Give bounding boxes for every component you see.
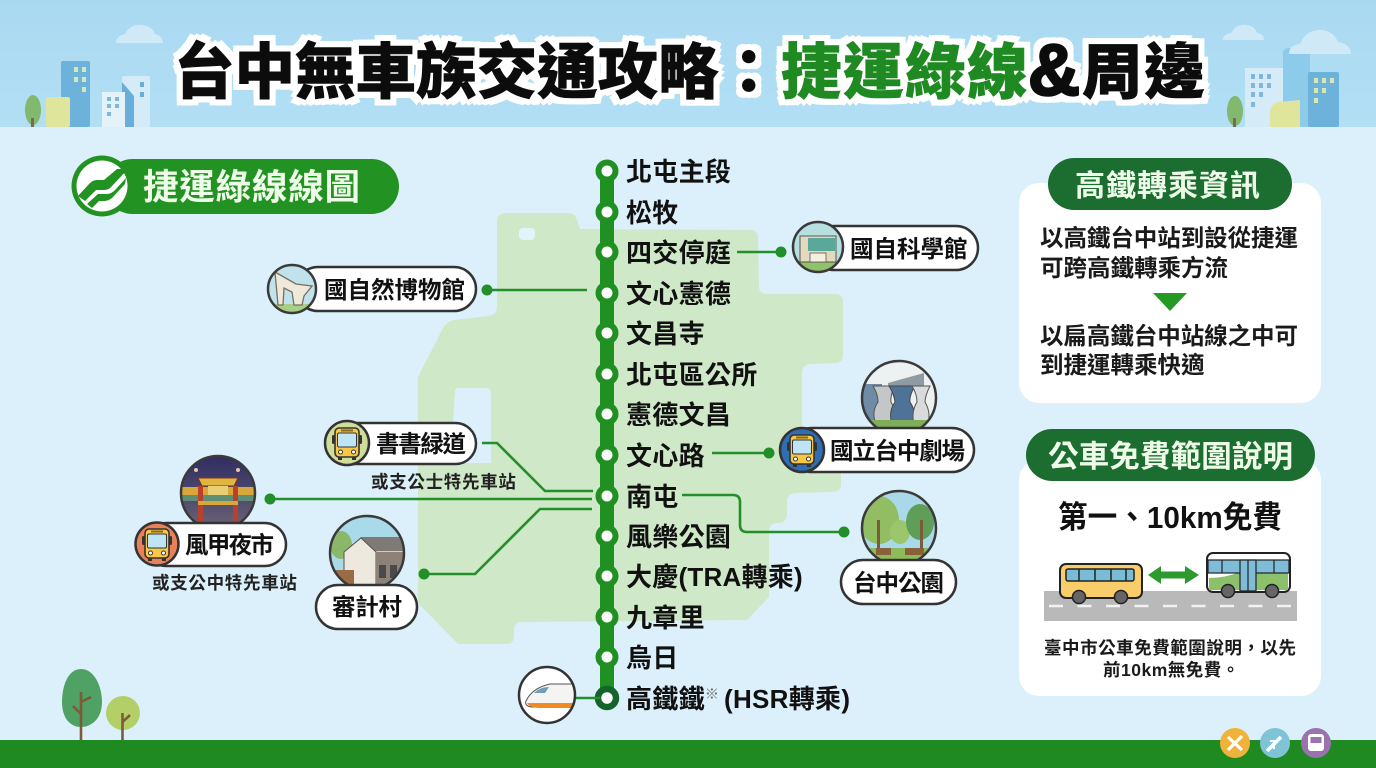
station names: (HSR轉乘) <box>724 684 850 714</box>
right city skyline <box>1223 25 1351 127</box>
trees <box>62 669 140 740</box>
road <box>1044 591 1297 621</box>
station markers <box>598 162 616 707</box>
text: transfer note: 到捷運轉乘快適 <box>1040 351 1205 378</box>
icon: bus stop <box>136 522 178 566</box>
title <box>174 31 1206 111</box>
ground strip <box>0 740 1376 768</box>
text: transfer route <box>1040 224 1298 281</box>
connector <box>482 284 587 296</box>
arrow: double headed <box>1148 566 1199 584</box>
panel: free bus range <box>1019 429 1321 696</box>
callout: Taichung park: 台中公園 <box>853 569 944 596</box>
callout: book green way: 或支公士特先車站 <box>371 472 517 492</box>
connector <box>264 494 592 504</box>
text: free range note: 前10km無免費。 <box>1103 660 1240 680</box>
station names: 憲德文昌 <box>626 400 731 430</box>
icon: science museum building <box>792 222 844 272</box>
green line route <box>598 157 850 714</box>
connector <box>712 448 774 458</box>
callout: book green way <box>325 421 593 492</box>
station names: 南屯 <box>626 482 679 512</box>
station names: 高鐵鐵 <box>626 684 705 714</box>
title: 台中無車族交通攻略： <box>174 38 779 106</box>
callout: Fengjia night market: 或支公中特先車站 <box>152 573 298 593</box>
callout: Taichung park <box>682 490 956 604</box>
icon: green bus <box>1207 553 1290 598</box>
icon: high speed rail train <box>519 667 600 723</box>
icon: bus stop <box>780 428 824 472</box>
station names: 北屯區公所 <box>626 360 758 390</box>
icon: village house <box>328 515 406 591</box>
station names: 大慶(TRA轉乘) <box>626 562 803 592</box>
station names: 四交停庭 <box>626 238 731 268</box>
station names: 北屯主段 <box>626 157 731 187</box>
text: first 10km free: 第一、10km免費 <box>1058 500 1282 535</box>
station names: 烏日 <box>626 643 679 673</box>
panel heading: 高鐵轉乘資訊 <box>1075 170 1260 203</box>
title: 捷運綠線 <box>781 38 1029 106</box>
left city skyline <box>25 25 163 127</box>
callout: natural science museum <box>268 265 587 313</box>
text: transfer route: 可跨高鐵轉乘方流 <box>1040 254 1228 281</box>
text: transfer note <box>1040 322 1298 378</box>
icon: theater building <box>860 360 938 427</box>
callout: book green way: 書書緑道 <box>376 431 466 457</box>
text: free range note <box>1044 638 1296 680</box>
connector <box>482 443 593 491</box>
panel: HSR transfer info <box>1019 158 1321 403</box>
station names: 文心憲德 <box>626 279 731 309</box>
section heading: green line map: 捷運綠線線圖 <box>143 167 360 207</box>
title: 周邊 <box>1082 38 1206 106</box>
station names <box>626 157 850 714</box>
connector <box>737 246 786 258</box>
station names: 文心路 <box>626 441 705 471</box>
callout: Fengjia night market: 風甲夜市 <box>185 532 274 558</box>
section heading: green line map <box>72 156 399 216</box>
footer badge icons <box>1220 728 1331 758</box>
header band <box>0 0 1376 127</box>
text: transfer note: 以扁高鐵台中站線之中可 <box>1040 322 1298 349</box>
icon: yellow bus <box>1060 564 1142 604</box>
callout: science museum: 國自科學館 <box>850 235 968 262</box>
station names: ※ <box>705 686 719 702</box>
icon: plane badge <box>1260 728 1290 758</box>
callout: science museum <box>737 222 978 272</box>
station names: 九章里 <box>626 603 705 633</box>
station names: 松牧 <box>626 198 679 228</box>
station names: 風樂公園 <box>626 522 731 552</box>
arrow: down triangle <box>1153 293 1187 311</box>
panel heading <box>1048 158 1292 210</box>
text: free range note: 臺中市公車免費範圍說明，以先 <box>1044 638 1296 658</box>
icon: route badge <box>1220 728 1250 758</box>
text: transfer route: 以高鐵台中站到設從捷運 <box>1040 224 1298 251</box>
map of Taichung <box>418 213 843 644</box>
callout: Shen Ji village: 審計村 <box>332 594 402 620</box>
connector <box>418 509 592 580</box>
icon: bus badge <box>1301 728 1331 758</box>
callout: Shen Ji village <box>316 509 592 629</box>
icon: bus stop <box>325 421 369 465</box>
station names: 文昌寺 <box>626 319 705 349</box>
callout: natural science museum: 國自然博物館 <box>324 276 465 303</box>
panel heading: 公車免費範圍說明 <box>1048 440 1293 474</box>
title: & <box>1028 31 1080 111</box>
callout: Fengjia night market <box>136 456 592 593</box>
connector <box>682 495 850 538</box>
icon: park <box>860 490 938 559</box>
panel heading <box>1026 429 1315 481</box>
icon: night market gate <box>180 454 256 522</box>
icon: museum <box>268 265 316 313</box>
callout: national theater: 國立台中劇場 <box>830 437 965 464</box>
callout: national theater <box>712 360 974 472</box>
